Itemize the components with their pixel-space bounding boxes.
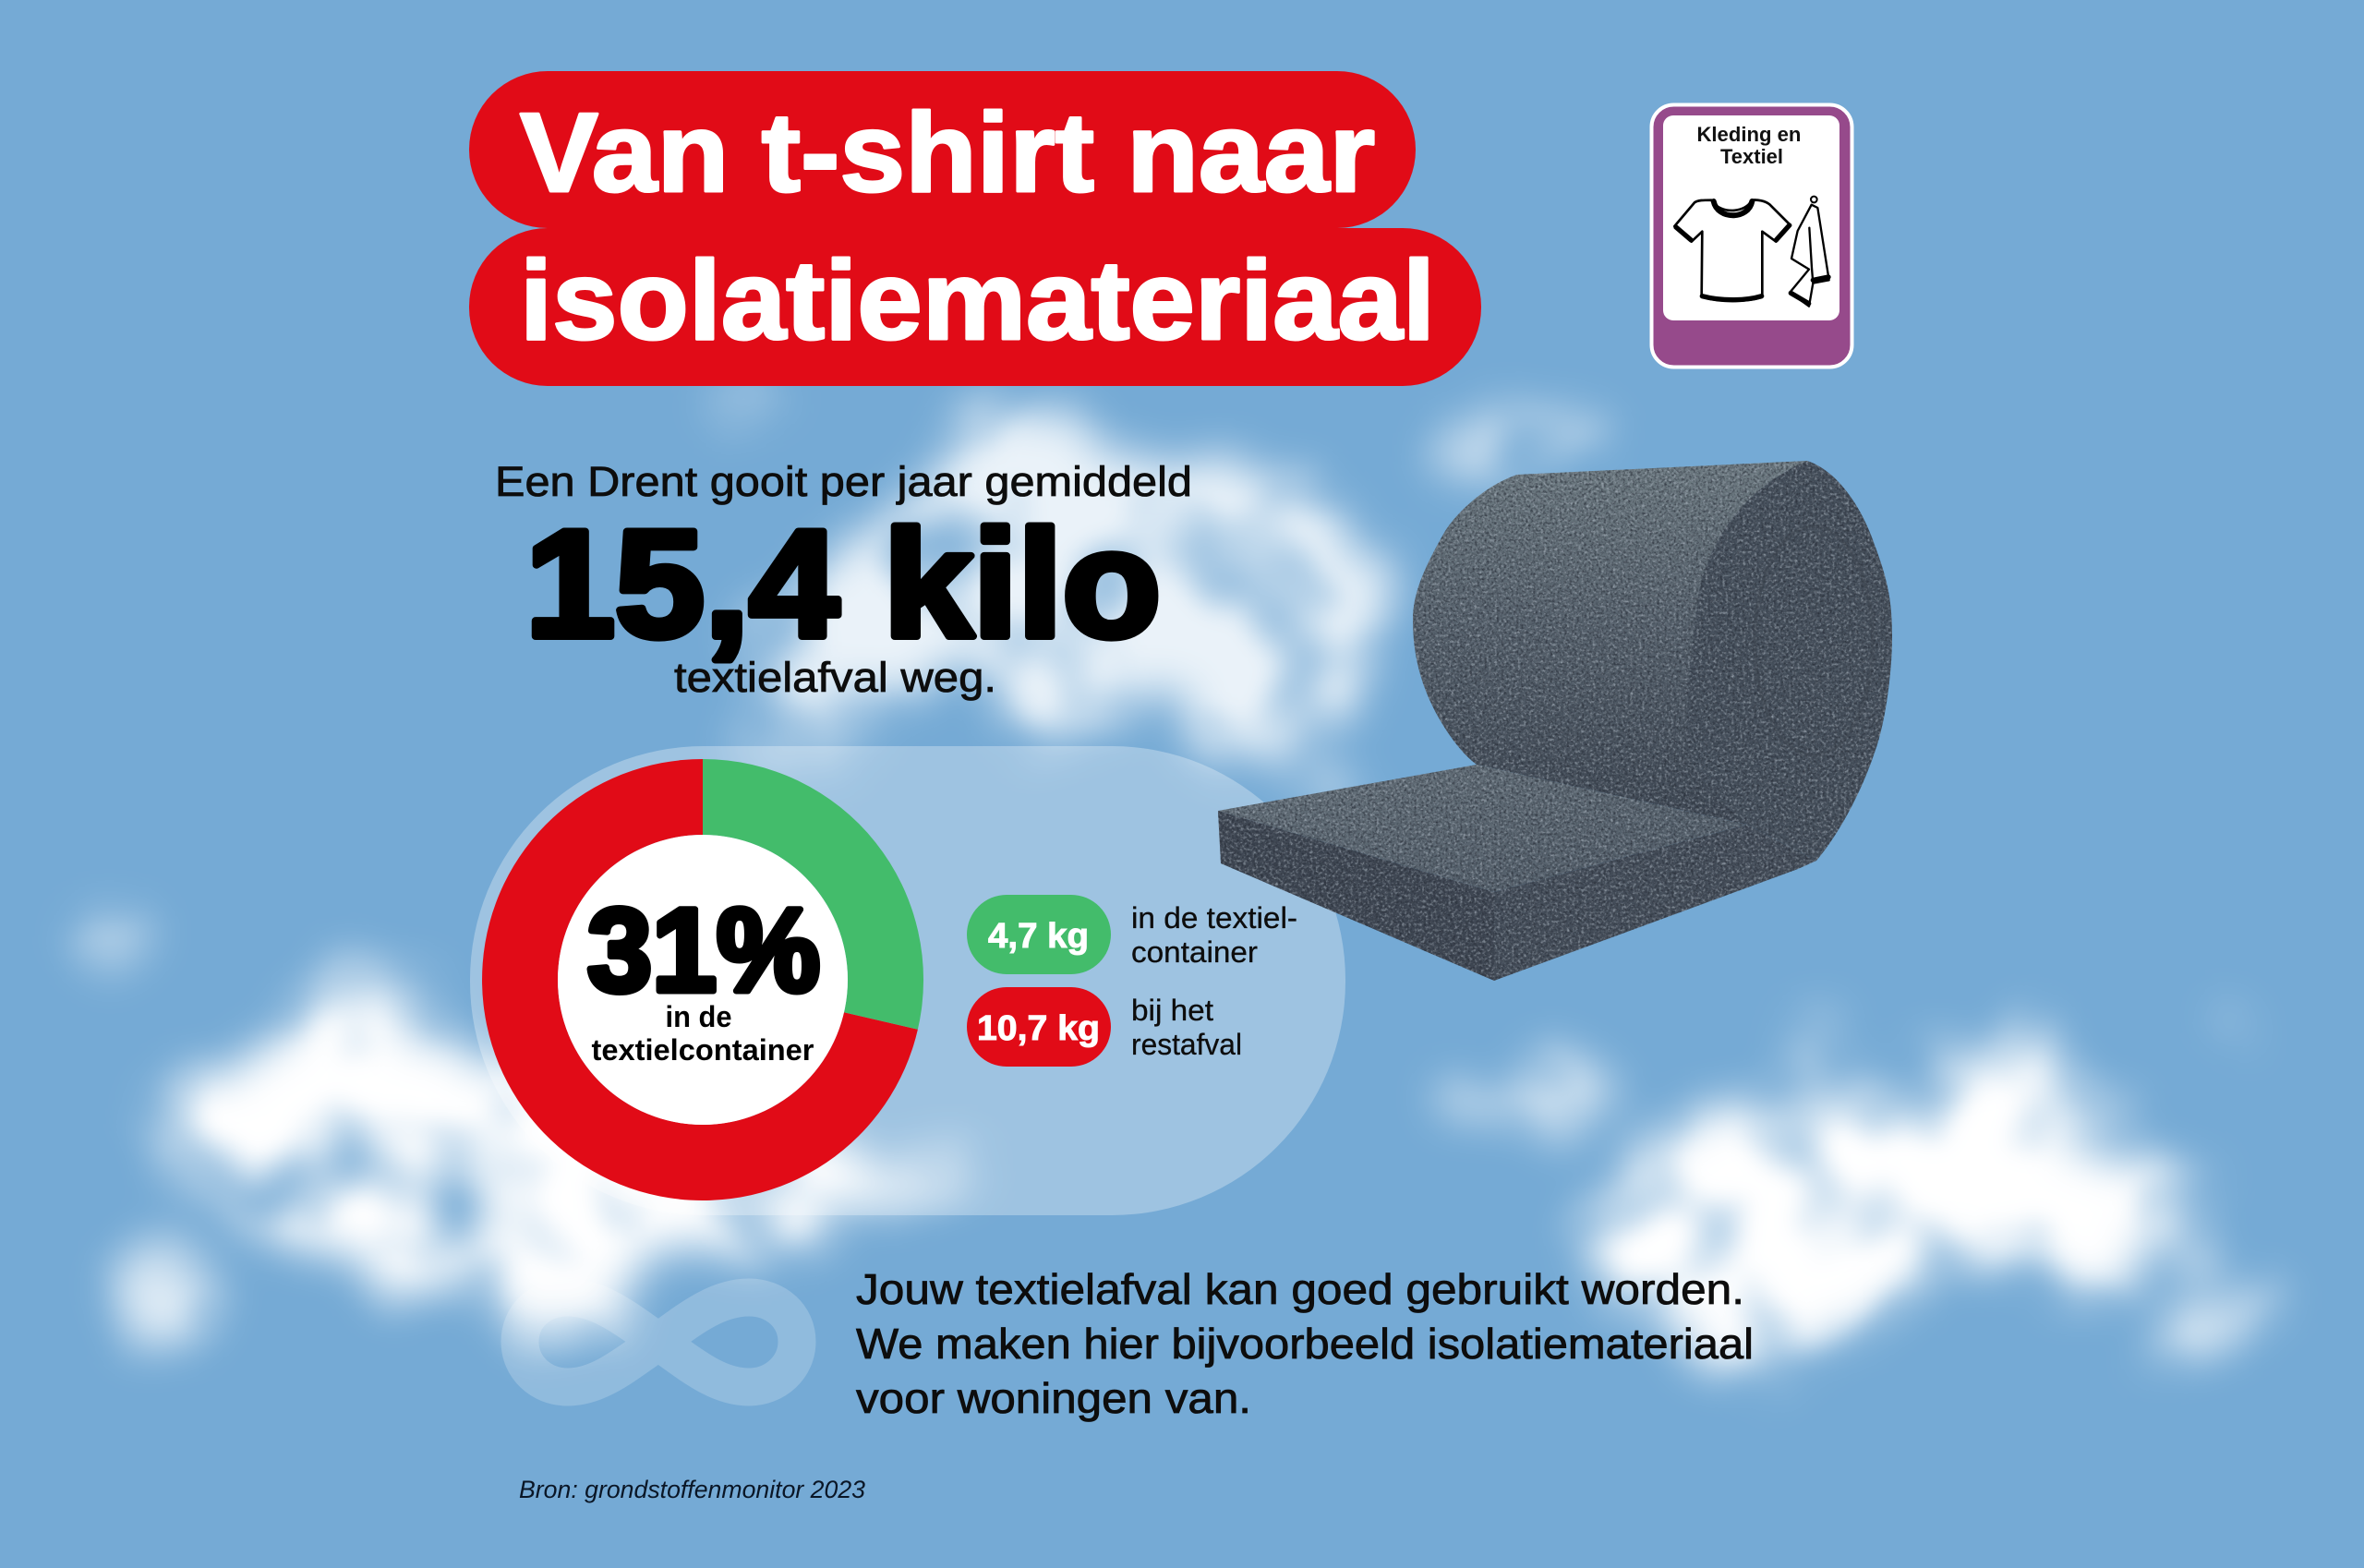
legend: residual waste: bij het <box>1131 994 1213 1027</box>
icon: t-shirt <box>1674 200 1791 301</box>
donut value: 31% <box>587 885 820 1017</box>
clouds <box>81 384 2276 1402</box>
legend: textile container: container <box>1131 935 1258 969</box>
closing paragraph: Jouw textielafval kan goed gebruikt worden. <box>856 1265 1744 1313</box>
title pill line 1 <box>469 71 1416 228</box>
legend: residual waste <box>967 987 1242 1067</box>
green segment <box>703 759 923 1030</box>
infinity symbol <box>520 1297 797 1387</box>
intro text closing: textielafval weg. <box>674 654 996 701</box>
front face of layer <box>1218 811 1494 981</box>
donut chart <box>482 759 923 1200</box>
donut caption: textielcontainer <box>591 1033 814 1067</box>
panel background <box>470 746 1345 1215</box>
title pill line 2 <box>469 228 1481 386</box>
legend: residual waste: 10,7 kg <box>977 1009 1100 1048</box>
donut caption: in de <box>666 1000 732 1033</box>
source note: Bron: grondstoffenmonitor 2023 <box>519 1476 865 1503</box>
insulation roll <box>1218 461 1892 981</box>
roll body <box>1413 461 1847 825</box>
icon: towel <box>1790 197 1829 307</box>
title line 2: isolatiemateriaal <box>520 237 1435 363</box>
closing paragraph: We maken hier bijvoorbeeld isolatiemateriaal <box>856 1320 1754 1368</box>
sign label: Kleding en <box>1696 123 1801 146</box>
side face of layer <box>1494 825 1816 981</box>
legend: residual waste: restafval <box>1131 1028 1242 1061</box>
red segment <box>482 759 918 1200</box>
panel: donut and legend <box>470 746 1345 1215</box>
icon: Kleding en Textiel sign <box>1651 105 1852 368</box>
title <box>469 71 1481 386</box>
flat top of unrolled layer <box>1218 765 1747 892</box>
title line 1: Van t-shirt naar <box>520 90 1375 215</box>
legend: textile container: in de textiel- <box>1131 901 1297 935</box>
closing paragraph: voor woningen van. <box>856 1374 1251 1422</box>
roll end disc <box>1687 461 1892 861</box>
roll spiral core <box>1755 526 1873 755</box>
big number: 15,4 kilo: 15,4 kilo <box>525 499 1161 669</box>
sign label: Textiel <box>1720 145 1783 168</box>
intro text line: Een Drent gooit per jaar gemiddeld <box>495 458 1192 505</box>
legend: textile container: 4,7 kg <box>988 917 1089 956</box>
legend: textile container <box>967 895 1306 974</box>
